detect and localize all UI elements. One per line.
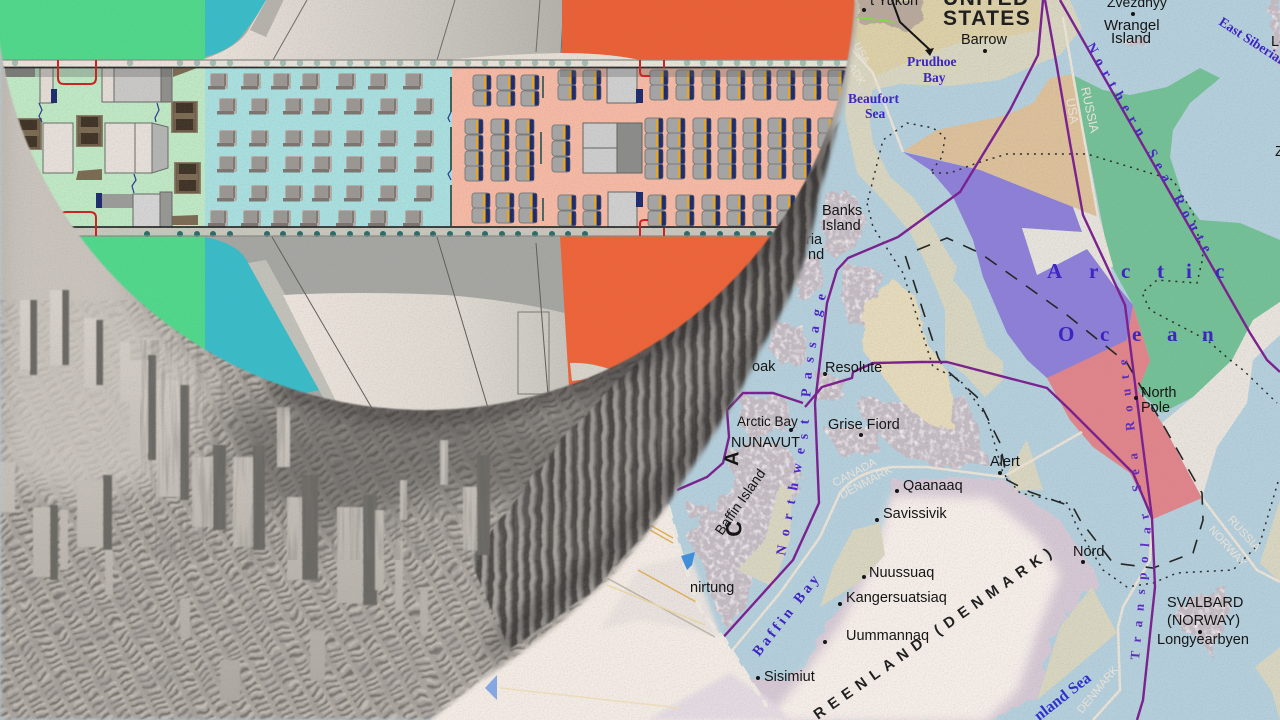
land labels: Nuussuaq: [869, 565, 934, 581]
Greenland label: REENLAND (DENMARK): [811, 541, 1060, 720]
street ribs: [0, 300, 658, 720]
Pangnirtung label: nirtung: [690, 580, 734, 596]
water labels: Baffin Bay: [750, 570, 825, 659]
tower shadows: [30, 290, 490, 605]
overhead shade band: [0, 68, 860, 77]
land labels: Longyearbyen: [1157, 632, 1249, 648]
water labels: Sea: [865, 106, 886, 121]
brown suites: [171, 101, 198, 133]
panel: 3D city relief: [0, 0, 860, 720]
Alaska land: [853, 0, 1040, 77]
lens drop shadow: [270, 130, 830, 414]
border labels: RUSSIA: [1225, 514, 1263, 554]
lower wing: [0, 236, 860, 420]
pale fairing: [453, 53, 638, 60]
center galley: [583, 123, 642, 173]
land labels: Kangersuatsiaq: [846, 590, 947, 606]
dashed coast edge: [668, 505, 767, 707]
wall lines: [0, 60, 860, 236]
orange zone top: [562, 0, 862, 61]
border labels: CANADA: [831, 456, 879, 490]
city ground: [0, 0, 860, 720]
land labels: North: [1141, 385, 1176, 401]
route labels: Northern Sea Route: [1086, 42, 1210, 253]
Arctic Ocean label: [1047, 259, 1224, 346]
water labels: [750, 14, 1280, 720]
dotted boundaries: [867, 123, 1278, 587]
route labels: Transpolar Sea Route: [1121, 360, 1151, 660]
first class floor: [0, 68, 206, 227]
land labels: ria: [806, 232, 823, 248]
land labels: Nord: [1073, 544, 1104, 560]
partitions: [540, 76, 544, 221]
teal zone top: [205, 0, 272, 57]
economy galleys and lavatories: [451, 68, 643, 227]
border labels: DENMARK: [838, 464, 894, 502]
economy class seats: [465, 70, 846, 226]
Arctic Ocean label: t: [1157, 259, 1164, 283]
Canadian tan interior: [862, 280, 955, 430]
strut: [248, 260, 336, 401]
pale boundary lines: [730, 17, 1280, 720]
Greenland interior: [765, 496, 1060, 720]
land labels: Sisimiut: [764, 669, 815, 685]
lake: [681, 552, 695, 570]
cabin divider with curtains: [450, 77, 452, 226]
arctic islands land masses: [685, 0, 1280, 660]
dashed boundary: [905, 238, 1203, 568]
bed panels: [43, 123, 168, 173]
land labels: Grise Fiord: [828, 417, 900, 433]
tower faces: [0, 290, 477, 700]
green zone top: [0, 0, 206, 61]
blue patch: [485, 675, 497, 700]
Arctic Ocean label: c: [1121, 259, 1130, 283]
flap rectangle: [518, 312, 549, 394]
Arctic Ocean label: e: [1132, 322, 1141, 346]
route labels: Northwest Passage: [776, 294, 826, 556]
closet top left: [40, 68, 53, 103]
wing root panel: [198, 0, 565, 61]
business class seats: [208, 73, 434, 226]
green and black Alaska routes: [855, 0, 934, 56]
panel: pale underlay map: [430, 503, 790, 720]
curtains: [39, 103, 159, 193]
land labels: Savissivik: [883, 506, 947, 522]
city dots: [756, 8, 1202, 680]
pale disputed zone: [1022, 207, 1115, 287]
bottom fuselage band: [0, 228, 860, 236]
purple zone: [903, 152, 1133, 378]
water labels: Prudhoe: [907, 54, 957, 69]
red exit doors: [58, 60, 664, 236]
water labels: Bay: [923, 70, 946, 85]
wing panel lines: [273, 0, 564, 60]
United States title: STATES: [943, 7, 1031, 30]
water labels: Beaufort: [848, 91, 899, 106]
Arctic Ocean label: A: [1047, 259, 1063, 283]
Arctic Ocean label: c: [1215, 259, 1224, 283]
land labels: oak: [752, 359, 776, 375]
border labels: RUSSIA: [1078, 86, 1102, 135]
Arctic Ocean label: O: [1058, 322, 1074, 346]
border labels: USA: [850, 40, 872, 67]
lavatory door top: [636, 89, 643, 103]
land labels: Baffin Island: [711, 466, 769, 538]
land labels: Alert: [990, 454, 1020, 470]
land labels: A: [721, 451, 744, 466]
pale map sheet: [430, 503, 782, 720]
border labels: [831, 40, 1263, 716]
vertical rib texture: [140, 340, 749, 560]
green Russian zone: [1073, 68, 1280, 413]
navy door bottom: [96, 193, 102, 208]
Greenland coast: [748, 478, 1100, 720]
Arctic Ocean label: a: [1167, 322, 1178, 346]
economy class floor: [452, 68, 862, 227]
Arctic Ocean label: r: [1089, 259, 1098, 283]
galley top: [102, 68, 172, 102]
fuselage walls: [0, 60, 860, 236]
land labels: Island: [822, 218, 861, 234]
border labels: ADK: [845, 62, 867, 88]
faded route lines: [500, 525, 715, 708]
cabin floors: [0, 68, 862, 227]
purple shipping routes: [677, 0, 1280, 720]
land labels: Island: [1111, 30, 1151, 47]
border labels: DENMARK: [1075, 664, 1121, 716]
tan Russian-US zone: [903, 74, 1098, 217]
navy door: [51, 89, 57, 103]
land labels: NUNAVUT: [731, 435, 800, 451]
pale right zone: [1162, 302, 1280, 498]
border labels: NORWAY: [1206, 524, 1249, 570]
land labels: Wrangel: [1104, 17, 1160, 34]
Arctic Ocean label: i: [1186, 259, 1192, 283]
land labels: Arctic Bay: [737, 414, 798, 429]
Brooks range relief: [858, 0, 925, 30]
dark canyon zone: [222, 228, 764, 541]
continental shelf beige areas: [738, 0, 1280, 720]
bottom windows: [147, 231, 820, 237]
land labels: Qaanaaq: [903, 478, 963, 494]
closet bottom: [133, 192, 172, 227]
flap lines: [272, 237, 548, 410]
lavatory door bottom: [636, 192, 643, 207]
ottomans: [76, 169, 102, 180]
mottled shading: [0, 300, 620, 720]
land labels: [711, 0, 1280, 685]
land labels: nd: [808, 247, 824, 263]
Arctic Ocean label: c: [1100, 322, 1109, 346]
Arctic Ocean label: n: [1202, 322, 1214, 346]
business class floor: [205, 68, 453, 227]
land labels: Pole: [1141, 400, 1170, 416]
vertical ribbed towers on the right: [470, 110, 845, 650]
upper wing: [0, 0, 862, 61]
right edge dark band: [490, 170, 835, 650]
grey wing panel: [205, 236, 564, 398]
panel: airplane floor plan: [0, 0, 862, 420]
orange zone bottom: [560, 236, 771, 386]
land labels: (NORWAY): [1167, 613, 1240, 629]
pale flap: [283, 293, 572, 415]
teal zone bottom: [205, 237, 319, 394]
border labels: USA: [1063, 97, 1081, 125]
land labels: Uummannaq: [846, 628, 929, 644]
brown wedge: [173, 68, 197, 77]
top windows: [15, 60, 837, 66]
lavatory bottom: [608, 192, 637, 227]
land labels: SVALBARD: [1167, 595, 1243, 611]
wing strip: [250, 0, 286, 37]
land labels: Resolute: [825, 360, 882, 376]
faint grey landmass: [600, 555, 720, 635]
first class furniture: [5, 68, 201, 227]
pale upper left relief: [0, 0, 220, 500]
pale ellipse: [570, 363, 612, 381]
blue curtains: [448, 112, 451, 180]
lavender ice edge: [647, 673, 790, 720]
grey bench: [102, 194, 133, 208]
lavatory top: [607, 68, 637, 103]
Greenland ice sheet: [748, 478, 1100, 720]
land labels: Banks: [822, 203, 862, 219]
land labels: Barrow: [961, 32, 1007, 48]
green zone bottom: [0, 236, 206, 416]
land labels: C: [721, 520, 747, 537]
pink zone: [1047, 305, 1202, 519]
route labels: [776, 42, 1210, 660]
top fuselage band: [0, 60, 860, 67]
overhead shade left: [5, 68, 35, 77]
